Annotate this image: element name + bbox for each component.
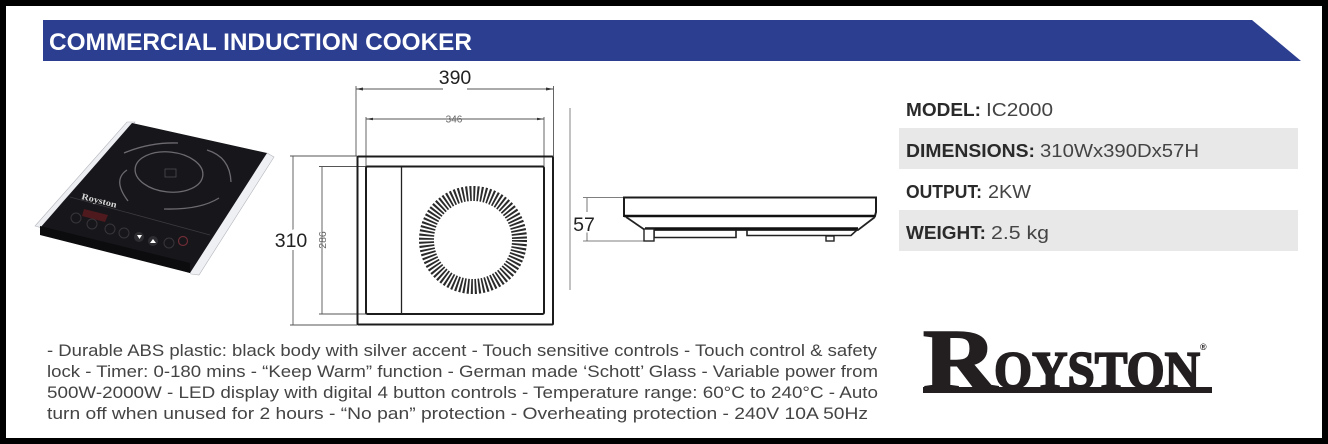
spec row: dimensions: DIMENSIONS: xyxy=(906,141,1035,161)
title: COMMERCIAL INDUCTION COOKER xyxy=(49,29,472,56)
dimension 57: 57 xyxy=(573,214,595,236)
product description: lock - Timer: 0-180 mins - “Keep Warm” function - German made ‘Schott’ Glass - Variable power from xyxy=(47,363,878,381)
dimension 310: 310 xyxy=(275,230,307,252)
product description xyxy=(47,342,878,423)
product photo: induction cooker: Royston xyxy=(81,191,118,210)
spec row: dimensions: 310Wx390Dx57H xyxy=(1040,141,1199,161)
spec row: model: MODEL: xyxy=(906,100,981,120)
product photo: induction cooker xyxy=(35,122,274,275)
spec row: model: IC2000 xyxy=(986,100,1053,120)
inner glass outline xyxy=(366,166,544,314)
dimension 57 xyxy=(573,198,644,241)
spec row: output: OUTPUT: xyxy=(906,182,982,202)
spec row: weight xyxy=(899,210,1298,251)
Royston logo: ® xyxy=(1200,342,1207,352)
dimension 390: 390 xyxy=(439,67,471,89)
control panel divider xyxy=(400,166,402,314)
Royston logo: R xyxy=(923,313,999,410)
dimension 286 xyxy=(317,166,366,314)
outer body outline xyxy=(358,156,553,324)
spec row: weight: WEIGHT: xyxy=(906,223,986,243)
dimension 310 xyxy=(275,156,357,325)
title banner xyxy=(43,20,1301,61)
dimension 286: 286 xyxy=(317,231,329,249)
product description: turn off when unused for 2 hours - “No pan” protection - Overheating protection - 240V 10A 50Hz xyxy=(47,405,868,423)
product description: 500W-2000W - LED display with digital 4 button controls - Temperature range: 60°C to 240°C - Auto xyxy=(47,384,878,402)
Royston logo: OYSTON xyxy=(994,342,1200,400)
spec row: model xyxy=(906,100,1053,120)
technical drawing: top view xyxy=(275,67,554,325)
vertical separator line xyxy=(569,108,571,290)
spec row: output xyxy=(906,182,1031,202)
product description: - Durable ABS plastic: black body with silver accent - Touch sensitive controls - Touch control & safety xyxy=(47,342,878,360)
spec table xyxy=(899,100,1298,251)
dimension 390 xyxy=(356,67,554,156)
vent ring xyxy=(426,194,520,286)
spec row: weight: 2.5 kg xyxy=(991,223,1049,243)
spec row: dimensions xyxy=(899,128,1298,169)
technical drawing: side view xyxy=(573,198,876,241)
Royston logo xyxy=(923,313,1212,410)
spec row: output: 2KW xyxy=(988,182,1031,202)
dimension 346: 346 xyxy=(446,114,463,126)
dimension 346 xyxy=(366,114,544,166)
